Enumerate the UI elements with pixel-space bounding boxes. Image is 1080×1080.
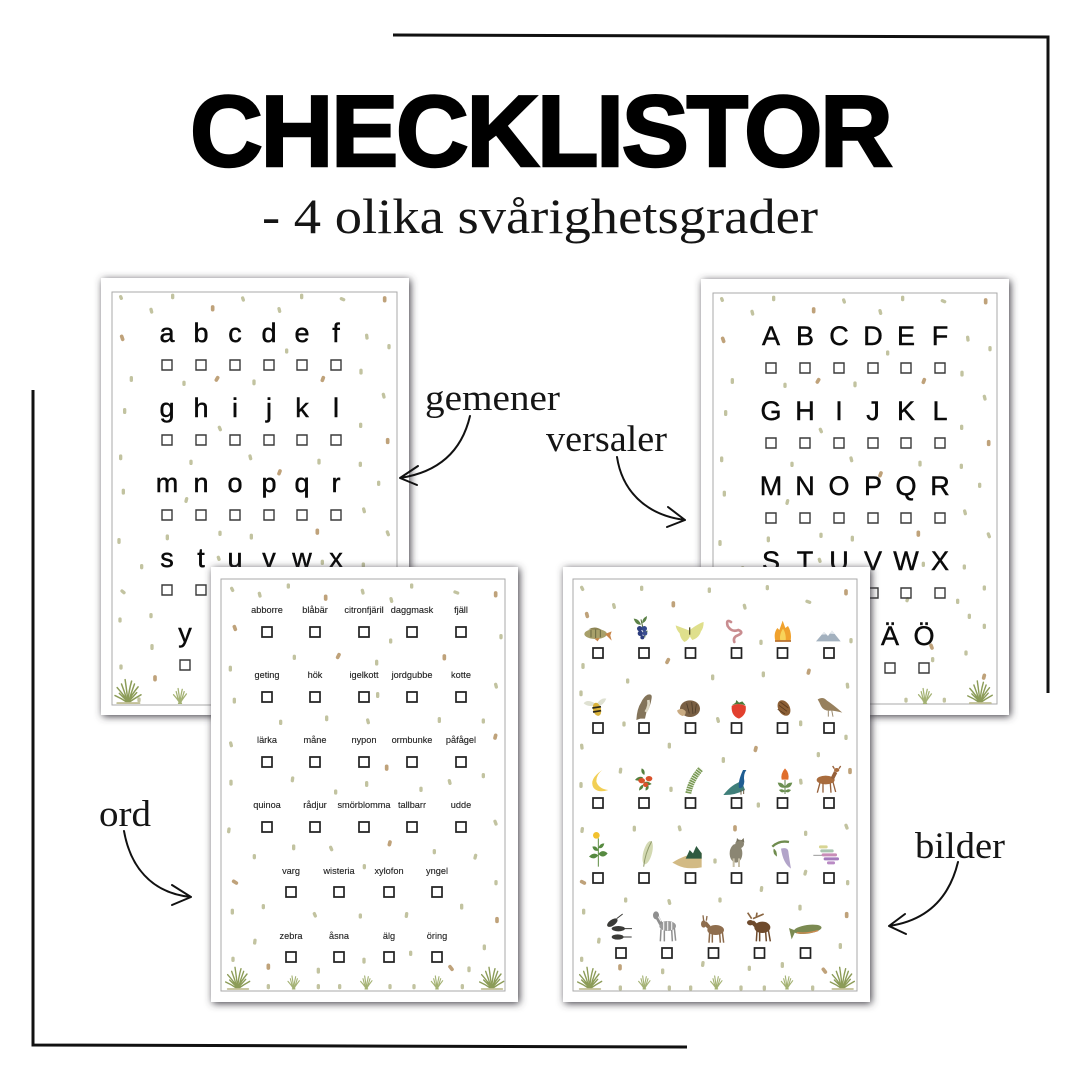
lowercase letters: p bbox=[261, 468, 277, 498]
word labels: hök bbox=[308, 670, 323, 680]
lowercase letters: t bbox=[197, 543, 205, 573]
checkboxes bbox=[593, 648, 834, 958]
word labels: jordgubbe bbox=[391, 670, 432, 680]
uppercase letters: D bbox=[863, 321, 883, 351]
arrow: ord to worksheet bbox=[124, 831, 191, 905]
frame: top right corner line bbox=[393, 35, 1048, 693]
uppercase letters: P bbox=[864, 471, 882, 501]
grass bbox=[968, 681, 992, 703]
word labels: geting bbox=[254, 670, 280, 680]
icon: perch bbox=[584, 627, 612, 641]
small grass bbox=[174, 689, 186, 703]
lowercase letters: n bbox=[193, 468, 209, 498]
lowercase letters: u bbox=[227, 543, 243, 573]
icon: hedgehog bbox=[677, 700, 700, 717]
lowercase letters: y bbox=[178, 618, 192, 648]
icon: donkey bbox=[701, 915, 724, 943]
grass bbox=[578, 967, 854, 989]
uppercase letters: G bbox=[760, 396, 782, 426]
icon: pine needles bbox=[640, 840, 655, 867]
icon: buttercup bbox=[589, 832, 608, 867]
lowercase letters: f bbox=[332, 318, 340, 348]
uppercase letters: F bbox=[932, 321, 948, 351]
grass bbox=[115, 680, 141, 703]
label: ord: ord bbox=[99, 794, 152, 835]
panel: bilder worksheet bbox=[563, 567, 870, 1002]
frame: bottom left corner line bbox=[33, 390, 687, 1047]
subtitle: - 4 olika svårighetsgrader bbox=[262, 188, 818, 244]
lowercase letters: s bbox=[160, 543, 174, 573]
icon: headland bbox=[672, 846, 702, 868]
word labels: blåbär bbox=[302, 605, 328, 615]
lowercase letters: b bbox=[193, 318, 209, 348]
icon: hawk bbox=[636, 694, 652, 720]
icon: fern bbox=[688, 769, 701, 793]
icon: moon bbox=[592, 770, 608, 791]
checkboxes bbox=[766, 363, 945, 673]
lowercase letters: o bbox=[227, 468, 243, 498]
uppercase letters: S bbox=[762, 546, 780, 576]
word labels: påfågel bbox=[446, 735, 476, 745]
word labels: wisteria bbox=[322, 866, 355, 876]
lowercase letters bbox=[156, 318, 343, 648]
grass bbox=[226, 967, 504, 989]
word labels: älg bbox=[383, 931, 395, 941]
arrow: gemener to worksheet bbox=[400, 416, 470, 485]
uppercase letters: I bbox=[835, 396, 843, 426]
lowercase letters: h bbox=[193, 393, 209, 423]
uppercase letters: N bbox=[795, 471, 815, 501]
uppercase letters: Ö bbox=[913, 621, 935, 651]
icon: zebra bbox=[653, 911, 676, 941]
label: bilder: bilder bbox=[915, 826, 1005, 867]
lowercase letters: e bbox=[294, 318, 310, 348]
uppercase letters: A bbox=[762, 321, 780, 351]
icon: trout bbox=[789, 923, 822, 939]
uppercase letters: Q bbox=[895, 471, 917, 501]
word labels: yngel bbox=[426, 866, 448, 876]
uppercase letters: Ä bbox=[881, 621, 899, 651]
word labels: fjäll bbox=[454, 605, 468, 615]
lowercase letters: q bbox=[294, 468, 310, 498]
lowercase letters: g bbox=[159, 393, 175, 423]
uppercase letters: M bbox=[760, 471, 782, 501]
lowercase letters: a bbox=[159, 318, 175, 348]
uppercase letters: K bbox=[897, 396, 915, 426]
uppercase letters: W bbox=[893, 546, 919, 576]
word labels: varg bbox=[282, 866, 300, 876]
lowercase letters: l bbox=[333, 393, 339, 423]
word labels: åsna bbox=[329, 931, 350, 941]
checkboxes bbox=[162, 360, 341, 670]
arrow: versaler to worksheet bbox=[617, 457, 685, 527]
word labels bbox=[251, 605, 476, 941]
icon: tadpoles bbox=[606, 914, 632, 940]
word labels: daggmask bbox=[391, 605, 434, 615]
panel: gemener worksheet bbox=[101, 278, 409, 715]
lowercase letters: k bbox=[295, 393, 309, 423]
uppercase letters: J bbox=[866, 396, 880, 426]
uppercase letters: T bbox=[797, 546, 813, 576]
word labels: citronfjäril bbox=[344, 605, 384, 615]
leaf pattern bbox=[119, 295, 389, 701]
lowercase letters: w bbox=[291, 543, 312, 573]
uppercase letters: E bbox=[897, 321, 915, 351]
word labels: måne bbox=[304, 735, 326, 745]
icon: wisteria bbox=[772, 842, 791, 869]
label: versaler: versaler bbox=[546, 419, 667, 460]
word labels: quinoa bbox=[253, 800, 282, 810]
icon: bird bbox=[818, 698, 842, 717]
uppercase letters: V bbox=[864, 546, 882, 576]
icon: deer bbox=[817, 766, 841, 793]
uppercase letters: H bbox=[795, 396, 815, 426]
icon: strawberry bbox=[732, 700, 746, 719]
icon: mountains bbox=[816, 631, 841, 641]
word labels: kotte bbox=[451, 670, 471, 680]
icon: peacock bbox=[723, 770, 746, 795]
grass bbox=[919, 689, 931, 703]
uppercase letters: C bbox=[829, 321, 849, 351]
lowercase letters: j bbox=[265, 393, 272, 423]
lowercase letters: d bbox=[261, 318, 277, 348]
leaf pattern bbox=[720, 297, 990, 703]
word labels: öring bbox=[427, 931, 447, 941]
word labels: rådjur bbox=[303, 800, 327, 810]
lowercase letters: r bbox=[332, 468, 340, 498]
word labels: udde bbox=[451, 800, 471, 810]
lowercase letters: i bbox=[232, 393, 238, 423]
word labels: smörblomma bbox=[337, 800, 391, 810]
label: gemener: gemener bbox=[425, 378, 560, 419]
icon: moose bbox=[747, 913, 770, 941]
icon: wolf bbox=[730, 838, 744, 867]
uppercase letters: B bbox=[796, 321, 814, 351]
icon: orange flower bbox=[778, 768, 792, 794]
uppercase letters: L bbox=[932, 396, 948, 426]
word labels: tallbarr bbox=[398, 800, 426, 810]
lowercase letters: m bbox=[156, 468, 178, 498]
leaves, grass and picture icons bbox=[578, 587, 854, 989]
icon: campfire bbox=[775, 621, 791, 641]
word labels: nypon bbox=[351, 735, 377, 745]
uppercase letters: U bbox=[829, 546, 849, 576]
icon: butterfly bbox=[676, 622, 704, 642]
icon: wasp bbox=[584, 698, 606, 717]
lowercase letters: v bbox=[262, 543, 276, 573]
lowercase letters: c bbox=[228, 318, 242, 348]
arrow: bilder to worksheet bbox=[889, 862, 958, 934]
panel: ord worksheet bbox=[211, 567, 518, 1002]
word labels: xylofon bbox=[374, 866, 404, 876]
word labels: zebra bbox=[280, 931, 303, 941]
word labels: lärka bbox=[257, 735, 278, 745]
uppercase letters: R bbox=[930, 471, 950, 501]
uppercase letters: X bbox=[931, 546, 949, 576]
lowercase letters: x bbox=[329, 543, 343, 573]
leaf pattern bbox=[226, 585, 504, 989]
icon: rose hips bbox=[635, 768, 652, 791]
icon: xylophone bbox=[813, 845, 839, 864]
word labels: abborre bbox=[251, 605, 283, 615]
icon: worm bbox=[727, 621, 741, 642]
uppercase letters bbox=[760, 321, 950, 651]
panel: versaler worksheet bbox=[701, 279, 1009, 715]
icon: pine cone bbox=[775, 698, 793, 718]
title: CHECKLISTOR bbox=[190, 76, 893, 188]
icon: blueberries bbox=[634, 616, 648, 639]
uppercase letters: O bbox=[828, 471, 850, 501]
word labels: igelkott bbox=[349, 670, 379, 680]
checkboxes bbox=[262, 627, 466, 962]
word labels: ormbunke bbox=[392, 735, 432, 745]
